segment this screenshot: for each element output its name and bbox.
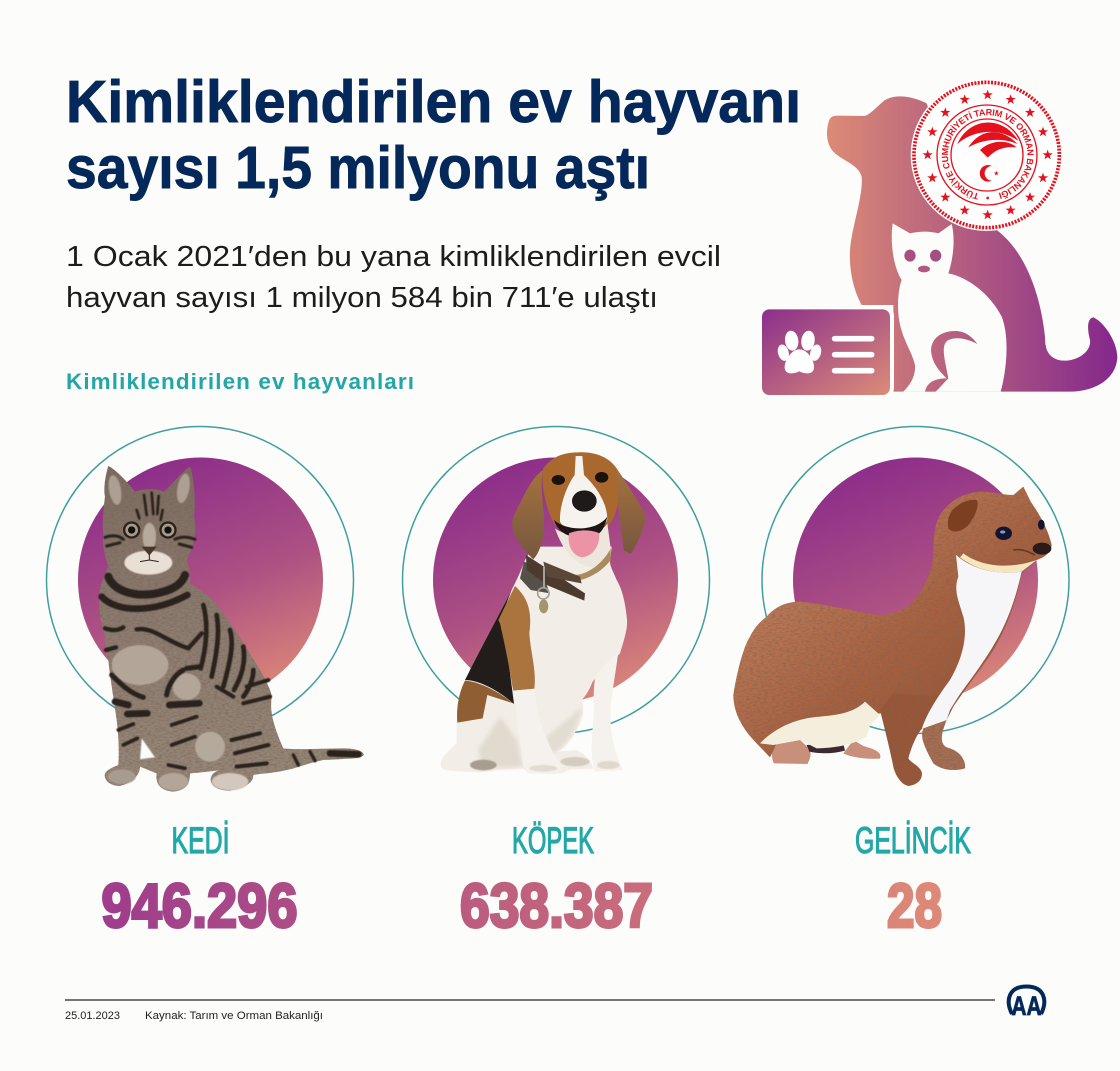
subtitle: 1 Ocak 2021′den bu yana kimliklendirilen evcil: [66, 241, 721, 273]
dog body: [441, 547, 627, 774]
icon: id card with paw: [758, 306, 894, 398]
cat figure: [99, 466, 364, 792]
cat face: [123, 521, 177, 562]
stat: dog: 638.387: [460, 872, 653, 941]
stat: dog: KÖPEK: [512, 820, 594, 861]
title: [66, 69, 801, 201]
icon: dog silhouette: [827, 96, 1117, 392]
stat: cat: [102, 820, 298, 941]
footer source: 25.01.2023: [65, 1010, 120, 1022]
section heading: Kimliklendirilen ev hayvanları: [66, 369, 414, 394]
logo: AA: [1009, 986, 1044, 1021]
title: Kimliklendirilen ev hayvanı: [66, 69, 801, 135]
stat: ferret: 28: [887, 872, 942, 941]
stat: ferret: GELİNCİK: [855, 820, 971, 861]
panel: cat: [46, 426, 364, 792]
icon: ministry seal: TÜRKİYE CUMHURİYETİ TARIM VE ORMAN BAKANLIĞI: [942, 109, 1034, 200]
ring and disc: [402, 426, 710, 734]
stat: cat: 946.296: [102, 872, 298, 941]
ferret front legs: [880, 693, 965, 786]
stat: cat: KEDİ: [172, 820, 230, 861]
footer source: Kaynak: Tarım ve Orman Bakanlığı: [145, 1010, 323, 1022]
subtitle: [66, 241, 721, 314]
stat: ferret: [855, 820, 971, 941]
ferret face: [995, 520, 1051, 555]
ring and disc: [762, 426, 1069, 734]
dog collar and tag: [526, 548, 611, 613]
ferret hind feet: [772, 740, 880, 764]
subtitle: hayvan sayısı 1 milyon 584 bin 711′e ulaştı: [66, 282, 658, 314]
dog head: [512, 452, 646, 567]
icon: cat silhouette: [892, 223, 1007, 392]
title: sayısı 1,5 milyonu aştı: [66, 135, 650, 201]
logo: AA: AA: [1012, 991, 1042, 1021]
ring and disc: [46, 426, 354, 734]
footer source: [65, 1010, 323, 1022]
panel: dog: [402, 426, 710, 774]
ferret figure: [733, 487, 1052, 786]
dog figure: [441, 452, 646, 774]
stat: dog: [460, 820, 653, 941]
icon: pet silhouette with id card and ministry seal: [762, 80, 1118, 395]
icon: ministry seal: [910, 80, 1062, 231]
panel: ferret: [733, 426, 1069, 786]
